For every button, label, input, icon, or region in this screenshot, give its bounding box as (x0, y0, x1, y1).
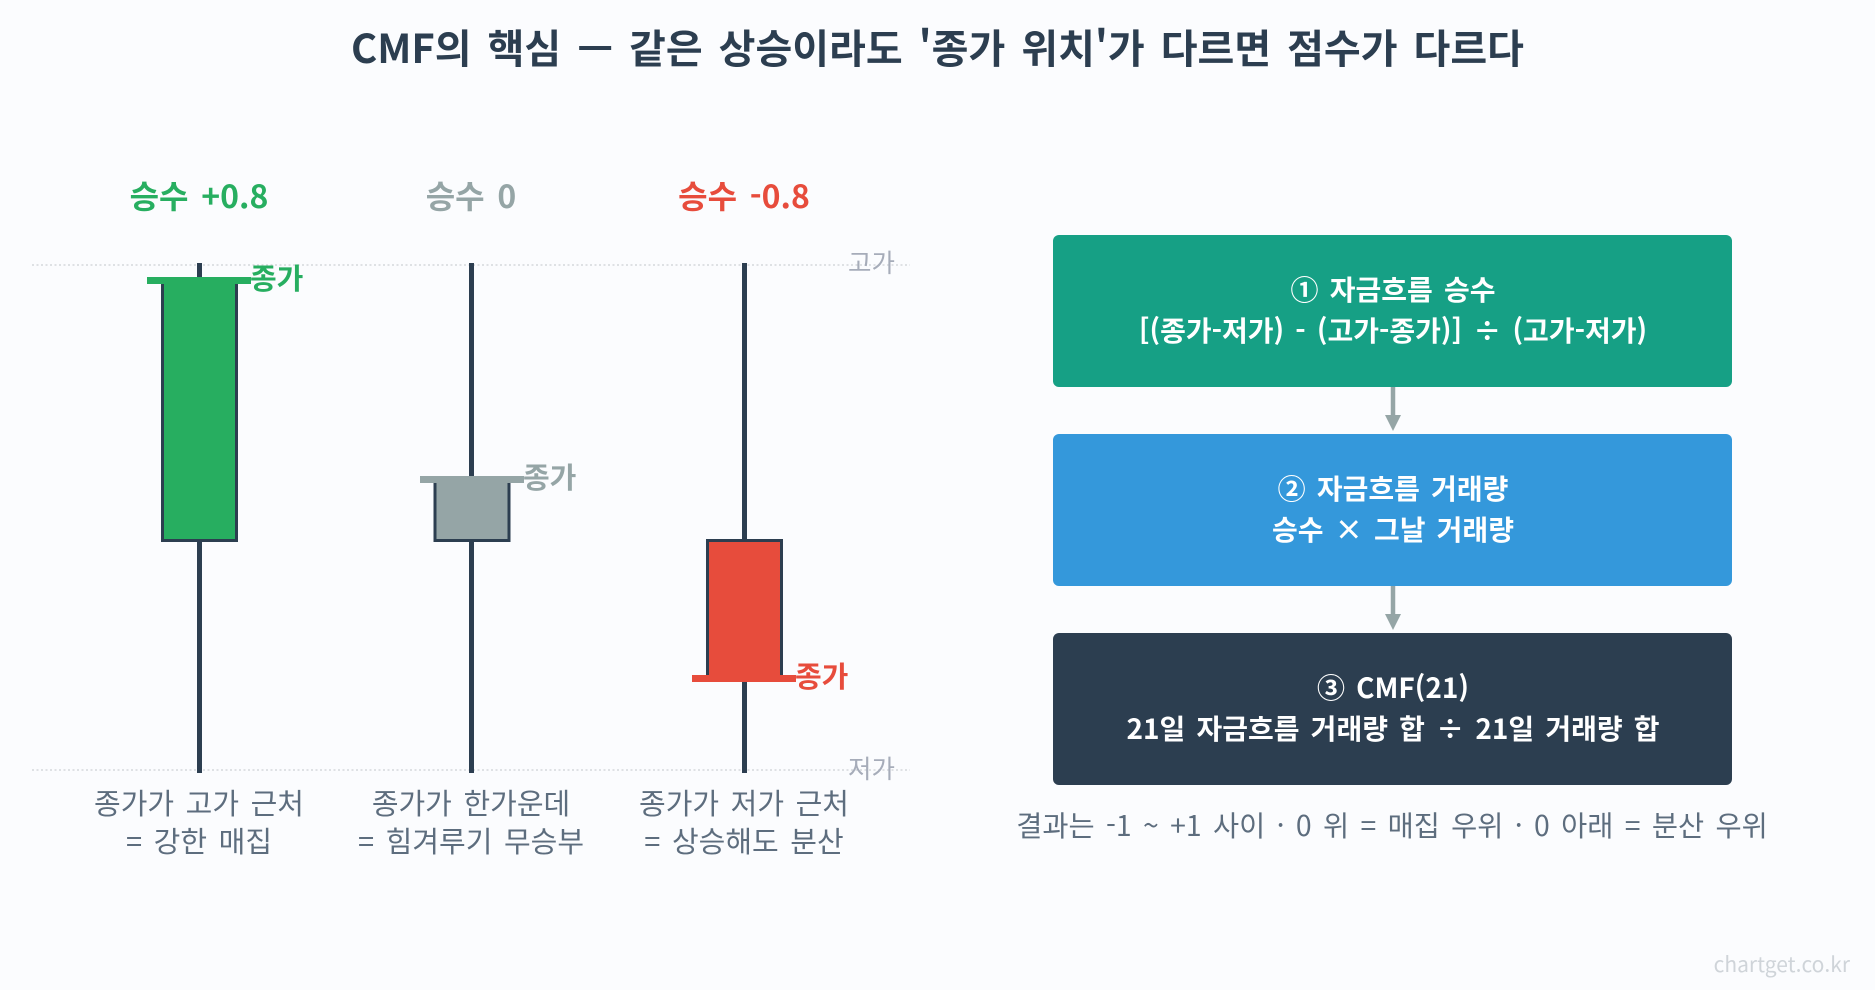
box: step 2 (1053, 434, 1732, 586)
box: step 1 (1053, 235, 1732, 387)
box: step 3: ③ CMF(21) (1317, 667, 1469, 707)
box: step 2: 승수 × 그날 거래량 (1272, 509, 1514, 549)
close label gray: 종가 (523, 455, 576, 497)
arrow: step 2 to 3 (1385, 586, 1401, 630)
label: high price: 고가 (848, 243, 895, 280)
box: step 3 (1053, 633, 1732, 785)
box: step 2: ② 자금흐름 거래량 (1278, 468, 1508, 508)
caption 2: 종가가 한가운데 (372, 781, 570, 823)
candle: close near low (639, 172, 849, 861)
caption 3: 종가가 저가 근처 (639, 781, 849, 823)
candle: close at middle (358, 172, 584, 861)
caption 1: = 강한 매집 (126, 819, 272, 861)
candle: close near high (94, 172, 304, 861)
multiplier -0.8: 승수 -0.8 (678, 172, 810, 218)
caption 1: 종가가 고가 근처 (94, 781, 304, 823)
multiplier +0.8: 승수 +0.8 (130, 172, 268, 218)
close label red: 종가 (795, 654, 848, 696)
box: step 3: 21일 자금흐름 거래량 합 ÷ 21일 거래량 합 (1126, 708, 1660, 748)
close label green: 종가 (250, 256, 303, 298)
title: CMF의 핵심 — 같은 상승이라도 '종가 위치'가 다르면 점수가 다르다 (351, 17, 1524, 75)
box: step 1: ① 자금흐름 승수 (1291, 269, 1495, 309)
multiplier 0: 승수 0 (426, 172, 516, 218)
result note: 결과는 -1 ~ +1 사이 · 0 위 = 매집 우위 · 0 아래 = 분산 우위 (1016, 804, 1768, 845)
arrow: step 1 to 2 (1385, 387, 1401, 431)
box: step 1: [(종가-저가) - (고가-종가)] ÷ (고가-저가) (1139, 310, 1647, 350)
label: low price: 저가 (848, 749, 895, 786)
caption 2: = 힘겨루기 무승부 (358, 819, 584, 861)
caption 3: = 상승해도 분산 (644, 819, 844, 861)
watermark: chartget.co.kr (1714, 949, 1851, 979)
